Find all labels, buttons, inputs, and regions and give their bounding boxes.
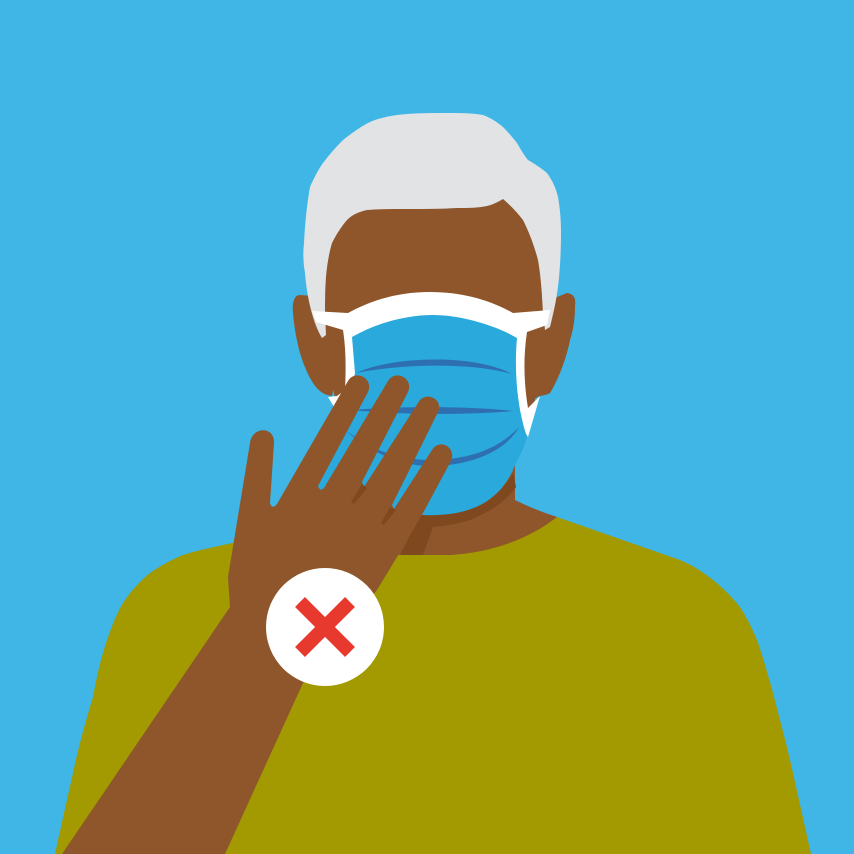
mask straps and white rim [312,292,550,437]
surgical mask [300,315,527,516]
shirt [55,517,811,854]
shadow on neck [400,473,516,555]
shadow between fingers 2 and 3 [351,484,367,504]
mask body [300,315,527,516]
left ear [293,295,345,396]
white circle [266,568,384,686]
red cross [300,602,350,652]
face [318,190,552,420]
hair [303,113,561,338]
shadow between fingers 3 and 4 [381,507,396,525]
middle pleat [352,407,513,414]
finger shadows [351,484,396,525]
neck [395,465,557,555]
bottom pleat [345,427,519,466]
hand and arm [62,375,452,854]
right ear [515,293,575,407]
prohibition badge [266,568,384,686]
top pleat [357,360,512,374]
